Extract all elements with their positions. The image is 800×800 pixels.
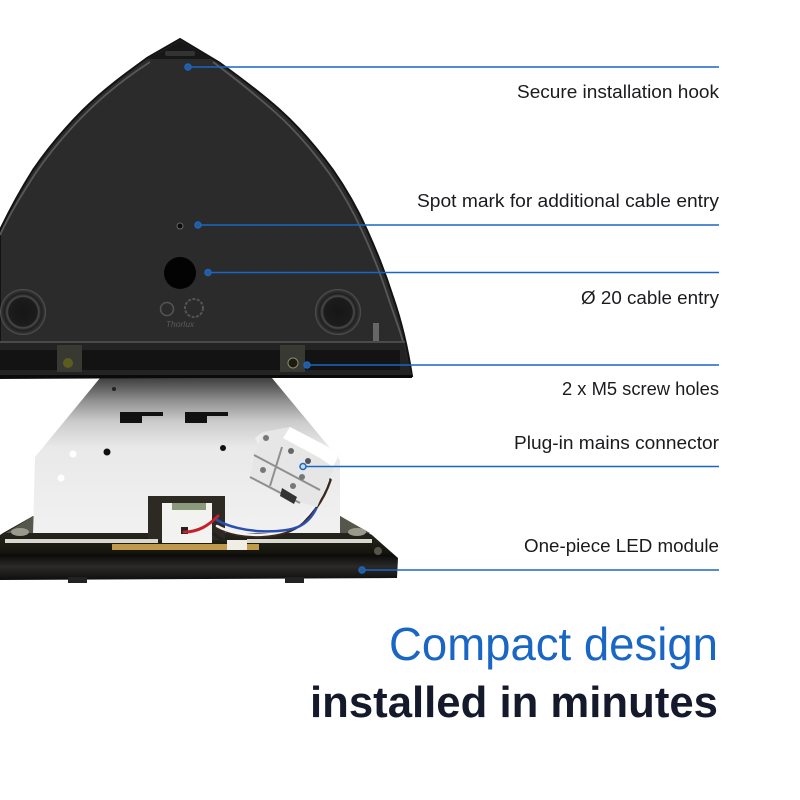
left boss bbox=[0, 289, 46, 335]
silver rails bbox=[5, 539, 372, 543]
wires bbox=[184, 480, 330, 542]
right boss bbox=[315, 289, 361, 335]
side clip bbox=[373, 323, 379, 341]
moulded logos: Thorlux bbox=[166, 319, 195, 329]
housing rim highlight bbox=[0, 62, 403, 342]
callout: spot mark bbox=[195, 190, 720, 228]
headline line 2: installed in minutes bbox=[310, 678, 718, 727]
moulded logos bbox=[160, 299, 203, 329]
callout: secure installation hook: Secure installation hook bbox=[517, 81, 720, 102]
mounting plate bbox=[33, 378, 340, 533]
wall housing bbox=[0, 39, 412, 378]
callout: screw holes: 2 x M5 screw holes bbox=[562, 378, 719, 399]
hook recess bbox=[148, 41, 212, 59]
callout: mains connector bbox=[300, 432, 719, 470]
callout: screw holes bbox=[304, 362, 719, 399]
callout: cable entry bbox=[205, 270, 720, 308]
cable entry hole bbox=[164, 257, 196, 289]
callout: cable entry: Ø 20 cable entry bbox=[581, 287, 720, 308]
screw hole left bbox=[63, 358, 73, 368]
callout: secure installation hook bbox=[185, 64, 720, 102]
spot mark bbox=[177, 223, 183, 229]
LED module assembly bbox=[0, 378, 398, 583]
LED tray base bbox=[0, 516, 398, 583]
gold circuit board bbox=[112, 544, 259, 550]
driver window and module bbox=[148, 496, 225, 543]
callout: LED module bbox=[359, 535, 719, 573]
housing body bbox=[0, 39, 412, 378]
plug-in mains connector bbox=[250, 427, 340, 507]
callout: mains connector: Plug-in mains connector bbox=[514, 432, 719, 453]
bottom mounting rail bbox=[0, 341, 412, 378]
white wire connector on board bbox=[227, 540, 247, 550]
headline line 1: Compact design bbox=[389, 618, 718, 670]
headline bbox=[310, 618, 718, 727]
screw hole right bbox=[288, 358, 298, 368]
callout: spot mark: Spot mark for additional cable entry bbox=[417, 190, 720, 211]
callout: LED module: One-piece LED module bbox=[524, 535, 719, 556]
